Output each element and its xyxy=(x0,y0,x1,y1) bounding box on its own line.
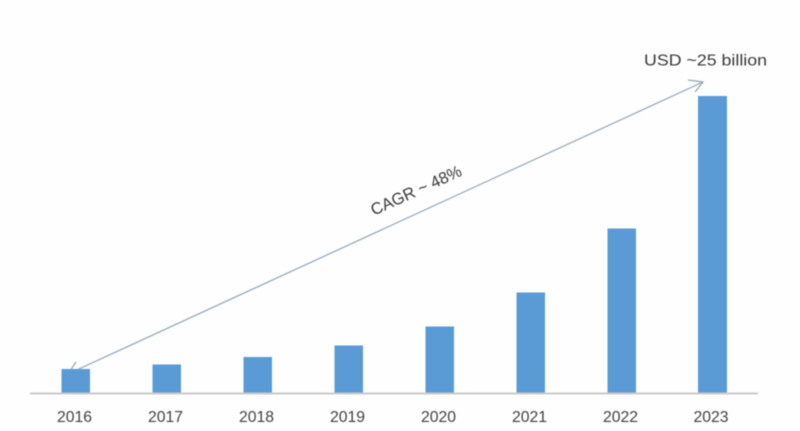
year labels: 2020 xyxy=(421,409,456,426)
CAGR label: CAGR ~ 48% xyxy=(368,162,465,219)
year labels: 2023 xyxy=(694,409,728,426)
arrow: growth trend, lower end runs behind the first bar xyxy=(68,80,703,374)
year labels: 2021 xyxy=(512,409,547,426)
x axis line xyxy=(30,392,758,394)
year labels xyxy=(57,409,728,426)
year labels: 2018 xyxy=(239,409,274,426)
year labels: 2019 xyxy=(330,409,365,426)
value callout: USD ~25 billion xyxy=(644,52,767,70)
year labels: 2016 xyxy=(57,409,92,426)
year labels: 2017 xyxy=(148,409,183,426)
year labels: 2022 xyxy=(603,409,638,426)
bars xyxy=(62,96,727,393)
